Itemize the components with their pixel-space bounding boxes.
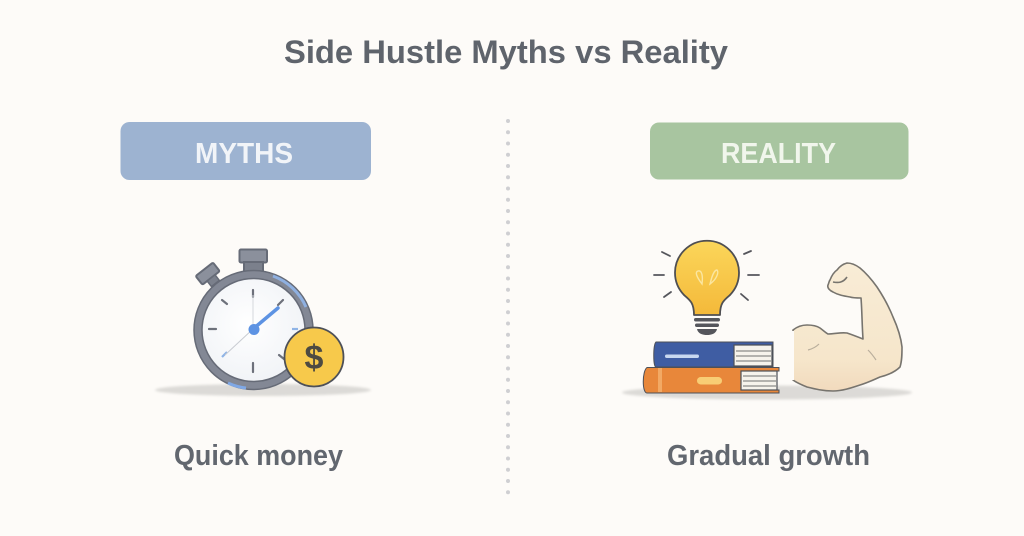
icon shadow: myths <box>155 384 371 396</box>
icon: stacked books <box>643 342 779 393</box>
icon: flexed arm <box>793 263 902 391</box>
panel: reality <box>622 122 912 472</box>
icon: dollar coin: $ <box>305 339 324 377</box>
icon: dollar coin <box>284 328 344 386</box>
myths header badge <box>120 122 371 180</box>
reality header badge: REALITY <box>721 138 836 170</box>
icon shadow: reality <box>622 386 912 400</box>
icon: stopwatch <box>194 250 313 390</box>
panel: myths <box>120 122 371 472</box>
myths header badge: MYTHS <box>195 138 293 170</box>
icon: light bulb <box>654 241 759 335</box>
label: gradual growth: Gradual growth <box>667 440 870 472</box>
divider: dotted centre line <box>506 121 510 494</box>
title: Side Hustle Myths vs Reality <box>284 34 728 70</box>
label: quick money: Quick money <box>174 440 343 472</box>
reality header badge <box>650 122 908 180</box>
